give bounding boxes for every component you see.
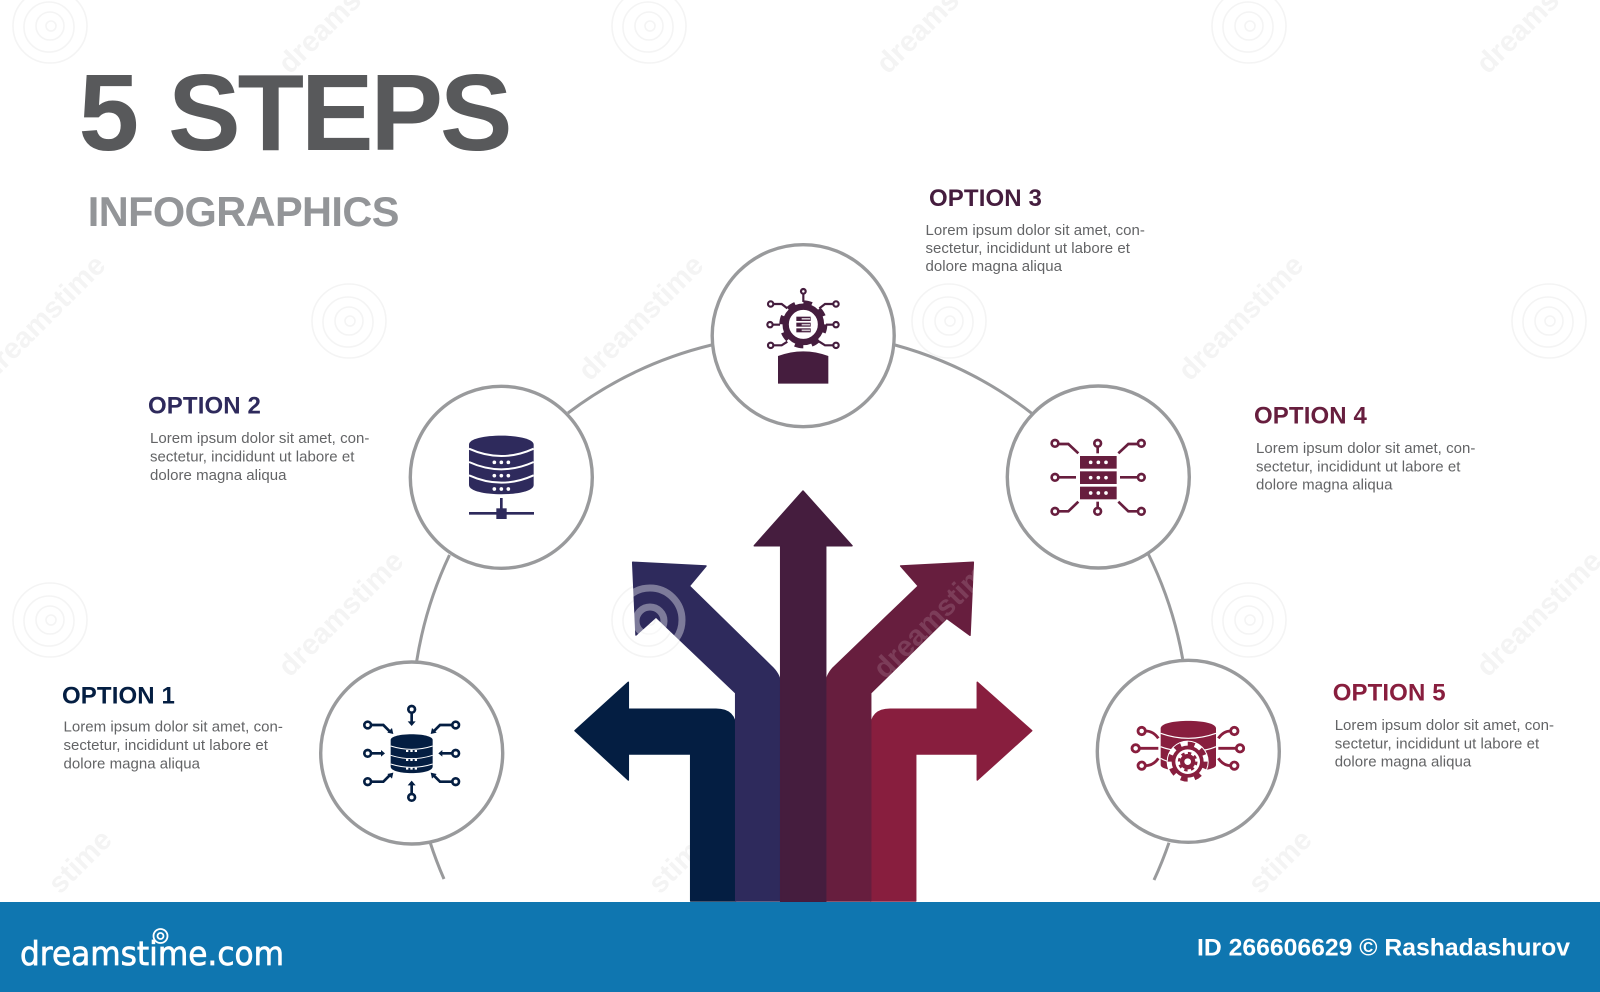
panel: option 2 xyxy=(148,386,592,568)
icon: database with gear xyxy=(1132,721,1244,783)
arrow: upper right xyxy=(826,562,973,901)
icon: database with inbound arrows xyxy=(364,706,459,801)
central diverging arrows xyxy=(575,491,1032,902)
heading: OPTION 1 xyxy=(62,682,175,709)
body text: sectetur, incididunt ut labore et xyxy=(64,737,269,754)
panel: option 3 xyxy=(712,185,1145,427)
body text: sectetur, incididunt ut labore et xyxy=(926,240,1131,257)
watermark pattern: stime xyxy=(42,824,119,900)
circle 3 xyxy=(712,245,894,427)
subtitle: INFOGRAPHICS xyxy=(88,188,399,235)
body text: dolore magna aliqua xyxy=(1256,477,1393,494)
heading: OPTION 4 xyxy=(1254,402,1368,430)
watermark over arrows: dreamstime xyxy=(867,547,1005,685)
connecting arc xyxy=(417,345,1183,880)
body text: Lorem ipsum dolor sit amet, con- xyxy=(1335,717,1554,734)
watermark pattern: dreamstime xyxy=(1172,249,1310,387)
icon: gear with server and user xyxy=(767,289,839,384)
arrow: left xyxy=(575,682,736,901)
body text: sectetur, incididunt ut labore et xyxy=(1256,458,1461,475)
footer logo: dreamstime.com xyxy=(20,934,284,973)
watermark pattern: stime xyxy=(1242,824,1319,900)
body text: dolore magna aliqua xyxy=(150,467,287,484)
circle 5 xyxy=(1097,660,1279,842)
body text: Lorem ipsum dolor sit amet, con- xyxy=(1256,440,1475,457)
footer id credit: ID 266606629 © Rashadashurov xyxy=(1197,934,1570,962)
heading: OPTION 2 xyxy=(148,392,261,420)
panel: option 4 xyxy=(1007,386,1475,568)
heading: OPTION 3 xyxy=(929,185,1042,212)
body text: dolore magna aliqua xyxy=(1335,754,1472,771)
title: 5 STEPS xyxy=(78,52,509,174)
arrow: upper left xyxy=(633,562,781,901)
icon: networked database xyxy=(469,436,534,519)
body text: Lorem ipsum dolor sit amet, con- xyxy=(150,430,369,447)
circle 2 xyxy=(410,386,592,568)
icon: server rack network xyxy=(1052,440,1145,515)
panel: option 5 xyxy=(1097,660,1554,842)
watermark over arrows xyxy=(618,547,1005,685)
panel: option 1 xyxy=(62,662,503,844)
body text: dolore magna aliqua xyxy=(64,755,201,772)
watermark pattern: stime xyxy=(642,824,719,900)
arrow: up xyxy=(754,491,852,902)
circle 4 xyxy=(1007,386,1189,568)
footer band xyxy=(0,902,1600,992)
circle 1 xyxy=(321,662,503,844)
body text: Lorem ipsum dolor sit amet, con- xyxy=(64,719,283,736)
arrow: right xyxy=(871,682,1032,901)
watermark pattern: dreamstime xyxy=(272,545,410,683)
body text: sectetur, incididunt ut labore et xyxy=(1335,735,1540,752)
body text: sectetur, incididunt ut labore et xyxy=(150,448,355,466)
body text: dolore magna aliqua xyxy=(926,258,1063,275)
heading: OPTION 5 xyxy=(1333,680,1446,706)
icon: spiral xyxy=(154,929,168,943)
watermark pattern: dreamstime xyxy=(572,249,710,387)
body text: Lorem ipsum dolor sit amet, con- xyxy=(926,222,1145,239)
